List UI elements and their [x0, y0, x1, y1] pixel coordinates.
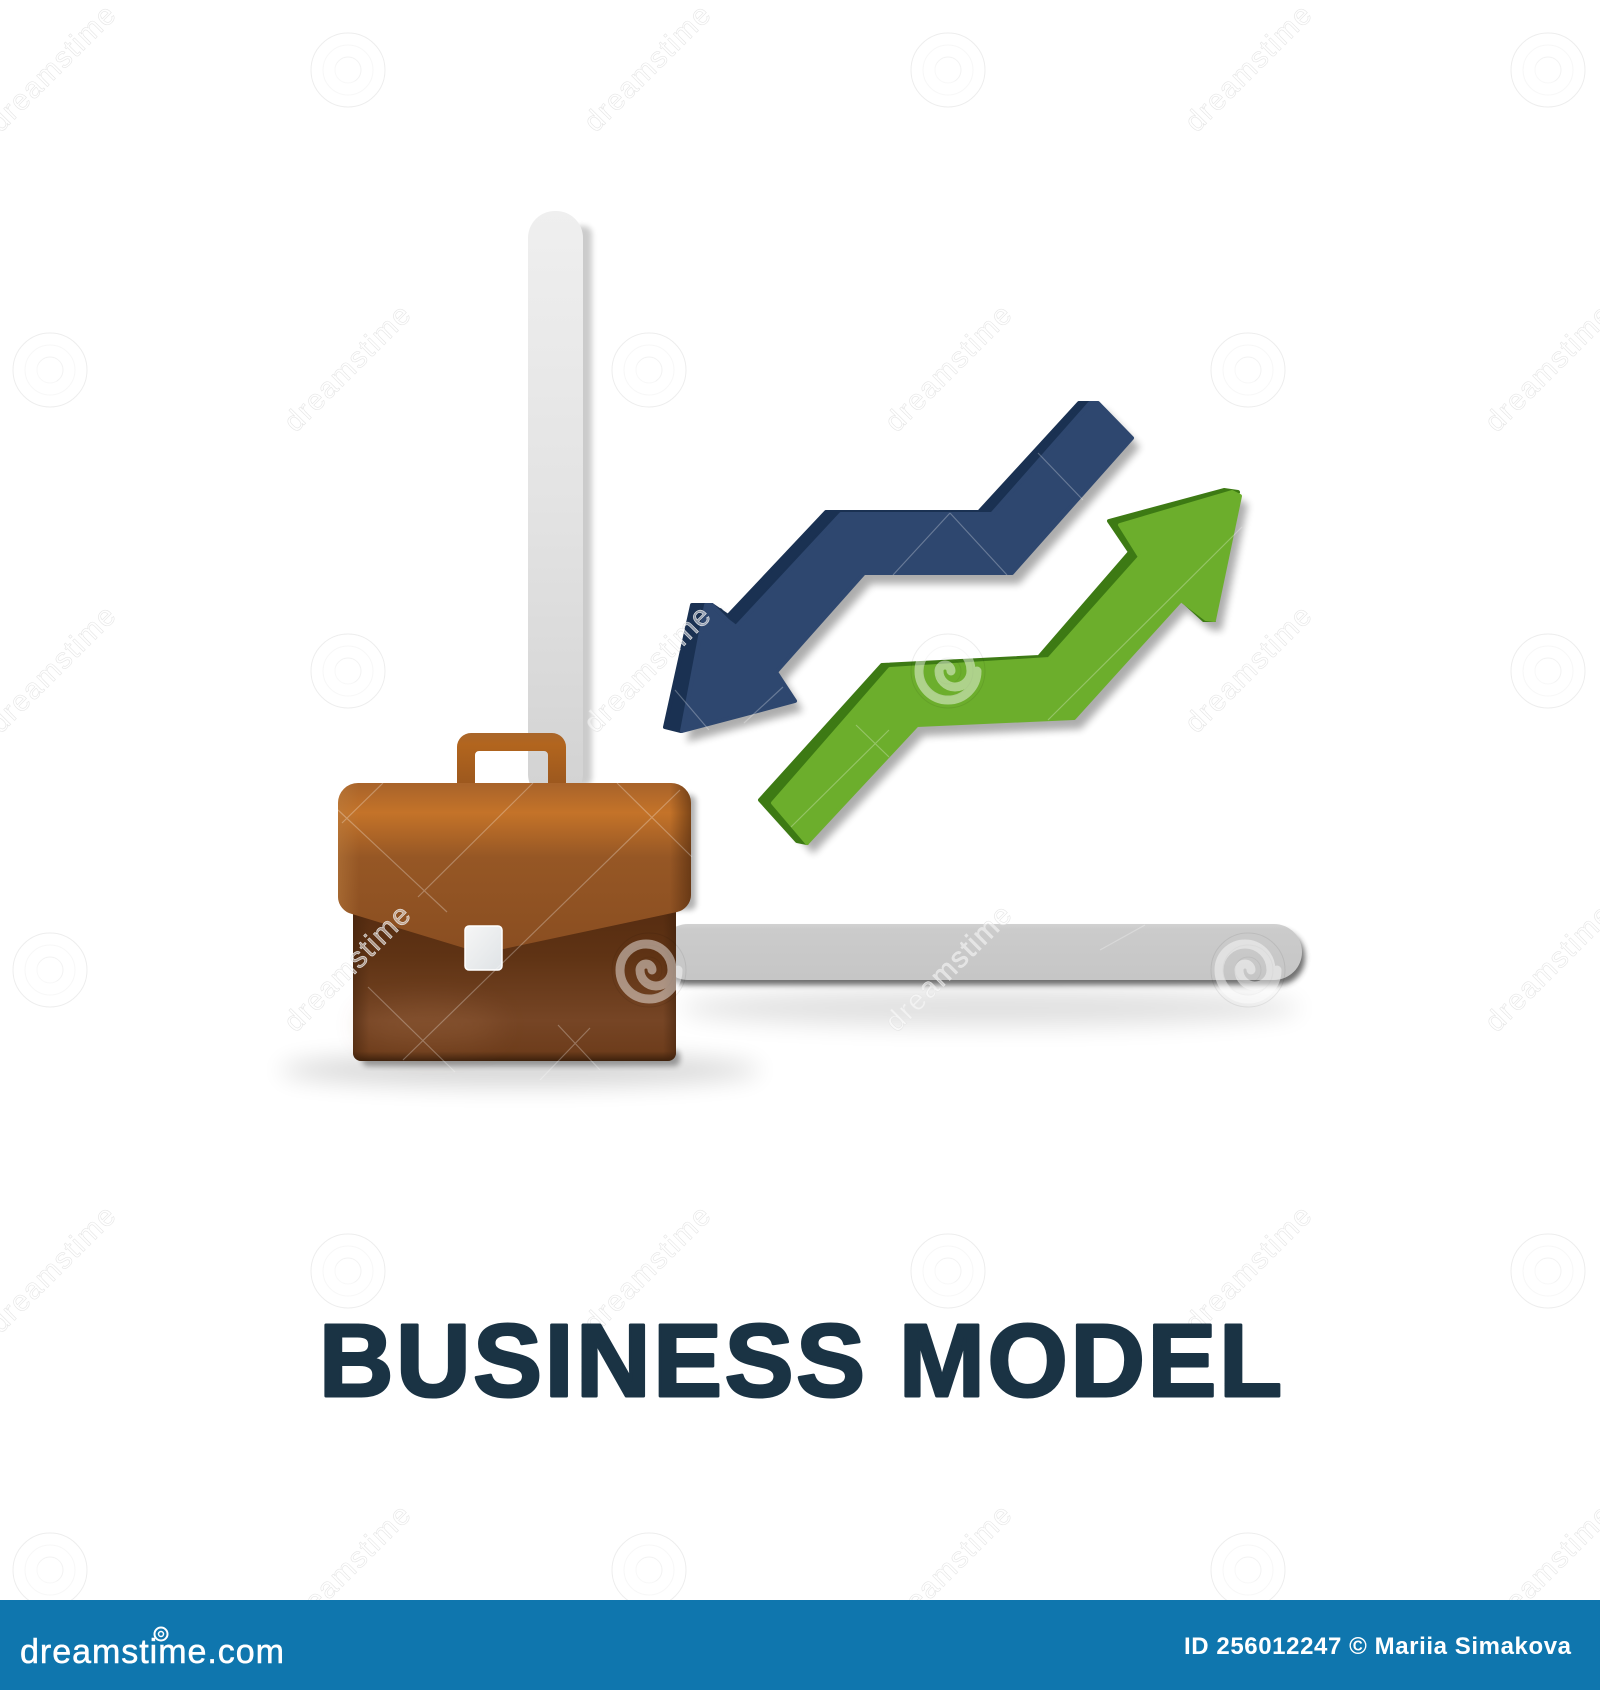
chart axes [528, 211, 1305, 1026]
blue arrow shadow [687, 410, 1140, 742]
blue arrow pointing down-left [665, 403, 1140, 742]
briefcase ground shadow [280, 1054, 760, 1086]
footer bar [0, 1600, 1600, 1690]
green arrow head underside [1181, 590, 1216, 622]
briefcase side shadow [660, 795, 696, 910]
watermark text: dreamstime [278, 299, 417, 438]
briefcase body [353, 900, 676, 1061]
vertical axis bar [528, 211, 583, 801]
green arrow front face [773, 492, 1240, 843]
watermark text: dreamstime [278, 899, 417, 1038]
briefcase body edge shading [353, 900, 676, 1061]
watermark text: dreamstime [879, 899, 1018, 1038]
watermark crossing lines [338, 453, 1242, 1080]
briefcase [280, 733, 760, 1086]
watermark text: dreamstime [879, 1499, 1018, 1638]
title: BUSINESS MODEL [319, 1303, 1282, 1418]
horizontal axis ground shadow [680, 990, 1300, 1026]
green arrow shadow [777, 499, 1248, 854]
briefcase handle [457, 733, 566, 790]
vertical axis shadow [572, 226, 592, 786]
watermark text: dreamstime [578, 0, 717, 138]
watermark text: dreamstime [578, 1200, 717, 1339]
footer logo spiral [154, 1628, 168, 1640]
briefcase body highlight [360, 1003, 500, 1047]
watermark text: dreamstime [578, 600, 717, 739]
footer credit text: ID 256012247 © Mariia Simakova [1184, 1633, 1572, 1660]
watermark text: dreamstime [278, 1499, 417, 1638]
blue arrow front face [682, 403, 1132, 731]
green arrow pointing up-right [760, 490, 1248, 854]
briefcase flap edge shading [338, 783, 691, 949]
horizontal axis bar [660, 924, 1302, 980]
briefcase body shadow [362, 1050, 680, 1066]
horizontal axis edge shadow [660, 930, 1305, 985]
green arrow side face [760, 490, 1238, 843]
watermark text: dreamstime [879, 299, 1018, 438]
briefcase clasp [465, 926, 502, 970]
briefcase flap [338, 783, 691, 949]
watermark text: dreamstime [1179, 1200, 1318, 1339]
watermark text: dreamstime [1179, 0, 1318, 138]
watermark text: dreamstime [1179, 600, 1318, 739]
blue arrow side face [665, 403, 1097, 731]
footer logo text: dreamstime.com [20, 1633, 284, 1671]
